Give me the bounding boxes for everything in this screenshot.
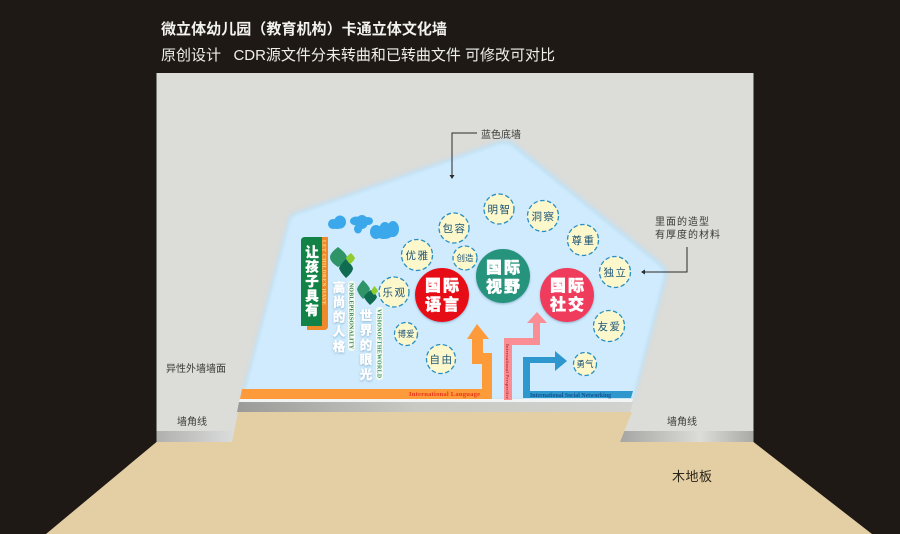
arrow: international social networking: [523, 351, 633, 399]
circle: international social: [540, 268, 594, 322]
badge: 乐观: [379, 277, 409, 307]
badge: 自由: [426, 344, 456, 374]
white skirting: [239, 399, 633, 402]
badge: 友爱: 友爱: [598, 320, 622, 333]
circle: international social: 国际: [550, 277, 586, 295]
badge: 优雅: [402, 240, 432, 270]
circle: international language: 国际: [425, 277, 461, 295]
callout: blue base wall: 蓝色底墙: [481, 128, 521, 141]
callout: thick material shape: 里面的造型: [655, 215, 710, 228]
wood floor: [46, 412, 872, 534]
badge: 尊重: [568, 224, 598, 256]
circle: international social: 社交: [550, 295, 586, 314]
english caption: LET CHILDREN HAVE: [320, 240, 326, 305]
label: exterior wall surface: 异性外墙墙面: [166, 362, 226, 375]
title: 微立体幼儿园（教育机构）卡通立体文化墙: [161, 20, 447, 38]
panel body: [243, 144, 664, 399]
badge: 友爱: [594, 310, 624, 342]
badge: 自由: 自由: [430, 353, 454, 366]
caption: noble personality: NOBLEPERSONALITY: [348, 283, 354, 350]
badge: 明智: 明智: [488, 203, 512, 216]
callout: thick material shape: 有厚度的材料: [655, 228, 721, 241]
circle: international language: 语言: [425, 295, 461, 314]
badge: 包容: [439, 213, 469, 243]
arrow: international perspective: [504, 312, 547, 400]
badge: 洞察: [528, 200, 558, 232]
badge: 乐观: 乐观: [382, 287, 406, 299]
label: international perspective: International Perspective: [505, 344, 510, 399]
badge: 博爱: 博爱: [397, 329, 415, 339]
circle: international vision: 国际: [486, 259, 522, 277]
outer wall: [156, 73, 754, 442]
panel glow: [241, 141, 667, 399]
badge: 独立: [600, 256, 630, 288]
callout: blue base wall: [450, 128, 521, 179]
badge: 优雅: 优雅: [406, 249, 430, 262]
orange back tab: [307, 237, 328, 330]
label: corner line left: 墙角线: [177, 415, 207, 428]
badge: 创造: [453, 246, 477, 270]
icon: leaves 1: [330, 247, 355, 278]
vertical heading: world vision: 世界的眼光: [358, 308, 372, 382]
icon: leaves 2: [357, 280, 378, 305]
label: wood floor: 木地板: [672, 469, 713, 484]
circle: international language: [415, 268, 469, 322]
circle: international vision: [476, 249, 530, 303]
caption: vision of the world: VISIONOFTHEWORLD: [376, 309, 382, 378]
corner line left: [156, 431, 236, 442]
badge: 勇气: [574, 352, 596, 376]
badge: 独立: 独立: [604, 266, 628, 279]
badge: 尊重: 尊重: [572, 234, 596, 247]
badge: 洞察: 洞察: [532, 210, 556, 223]
badge: 包容: 包容: [442, 222, 466, 235]
clouds: [328, 215, 399, 239]
subtitle: 原创设计 CDR源文件分未转曲和已转曲文件 可修改可对比: [161, 47, 555, 64]
badge: 勇气: 勇气: [576, 359, 594, 369]
baseboard: [237, 402, 633, 412]
label: international language: International Language: [409, 391, 480, 398]
label: corner line right: 墙角线: [667, 415, 697, 428]
arrow: international language: [240, 324, 492, 399]
circle: international vision: 视野: [486, 277, 522, 296]
green banner: [301, 237, 322, 326]
badge: 明智: [484, 194, 514, 224]
label: international social networking: International Social Networking: [530, 393, 611, 399]
blue wall panel: [239, 141, 667, 402]
badge: 创造: 创造: [456, 253, 474, 263]
banner: let children have: [301, 237, 328, 330]
banner heading: 让孩子具有: [303, 245, 319, 318]
corner line right: [620, 431, 754, 442]
badge: 博爱: [394, 322, 418, 346]
callout: thick material shape: [641, 215, 721, 274]
vertical heading: noble character: 高尚的人格: [330, 280, 345, 354]
